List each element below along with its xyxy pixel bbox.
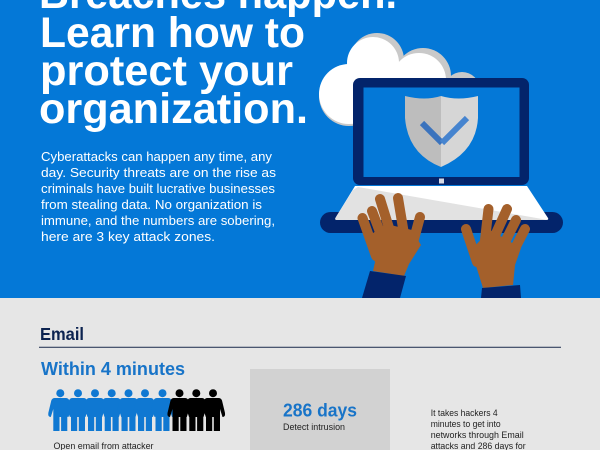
intro text block: Cyberattacks can happen any time, any [41,149,272,164]
heading: within 4 minutes: Within 4 minutes [41,358,185,379]
panel: hero background [0,0,600,298]
intro text block: criminals have built lucrative businesses [41,181,276,196]
title [39,0,397,133]
panel: stat box [250,369,390,450]
intro text block: here are 3 key attack zones. [41,229,215,244]
icon: cloud [319,33,480,126]
text block: summary: It takes hackers 4 [431,408,498,419]
text block: summary: minutes to get into [431,419,501,430]
icon: row of people [48,389,225,431]
icon: left hand [362,198,421,298]
heading: Email: Email [40,324,84,344]
laptop base [320,212,563,233]
panel: email section [0,298,600,450]
title: organization. [39,86,308,133]
text block: summary [431,408,526,450]
intro text block: immune, and the numbers are sobering, [41,213,275,228]
stat: 286 days: 286 days [283,400,357,420]
title: Learn how to [40,10,305,57]
icon: windows logo [439,178,444,184]
intro text block: day. Security threats are on the rise as [41,165,277,180]
label: detect intrusion: Detect intrusion [283,422,345,433]
text block: summary: networks through Email [431,430,524,441]
title: protect your [40,48,293,95]
illustration: laptop with cloud and hands [319,33,563,298]
intro text block: from stealing data. No organization is [41,197,263,212]
icon: right hand [466,209,525,298]
laptop screen [353,78,529,185]
intro text block [41,149,277,244]
icon: shield with check [405,96,478,167]
